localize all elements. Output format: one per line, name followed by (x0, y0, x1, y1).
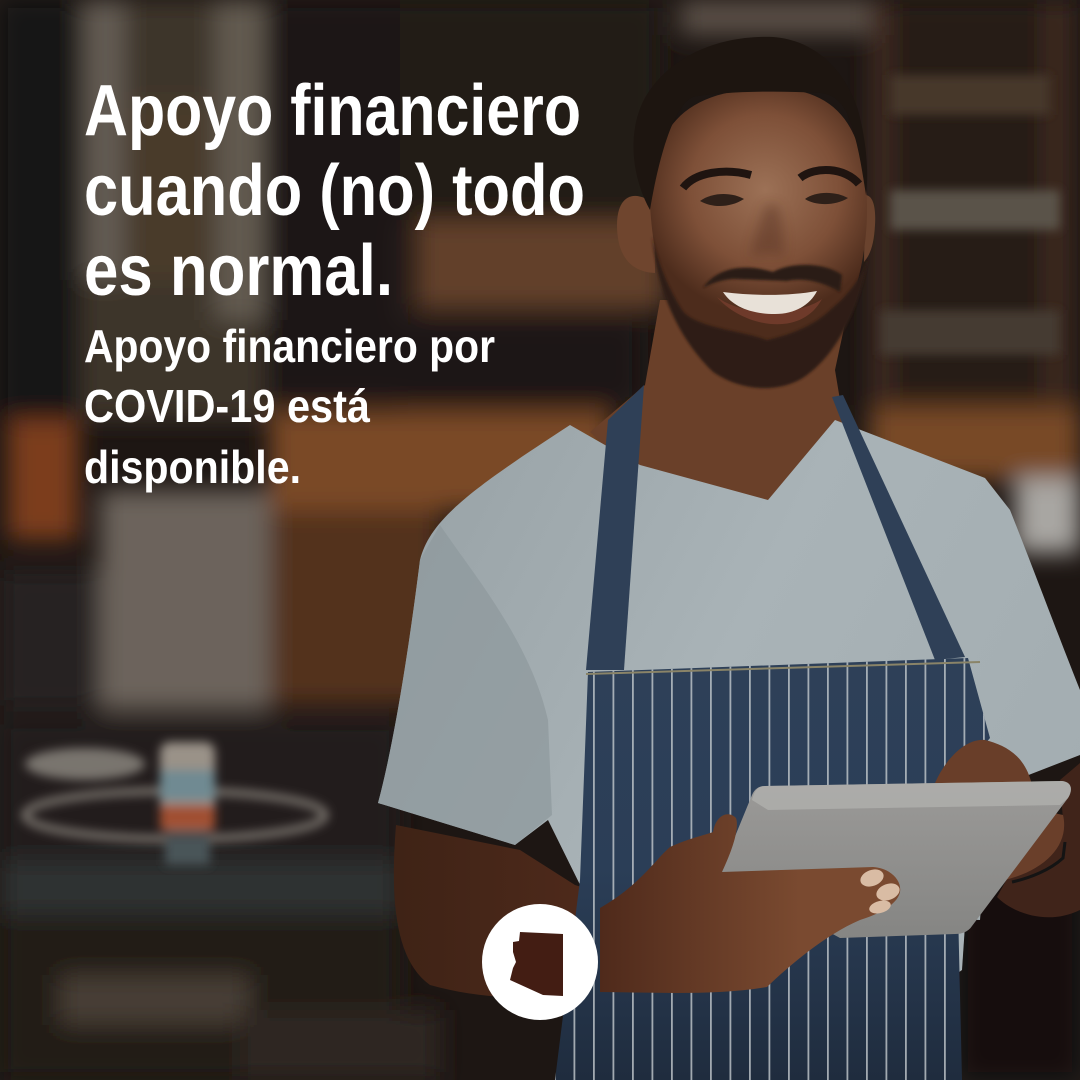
teeth (723, 291, 817, 314)
apron (555, 385, 990, 1080)
subtitle: COVID-19 está (84, 380, 370, 432)
man (378, 37, 1080, 1080)
forearm, left of image (394, 825, 690, 998)
right arm and hand behind tablet (935, 740, 1080, 917)
icon: Arizona state logo (482, 904, 598, 1020)
eyebrow right (800, 170, 859, 184)
head (617, 37, 875, 388)
face (650, 88, 867, 386)
title: es normal. (84, 231, 393, 311)
tablet (720, 781, 1071, 938)
hair (634, 37, 867, 210)
title: cuando (no) todo (84, 151, 585, 231)
subtitle: Apoyo financiero por (84, 320, 495, 372)
eyebrow left (683, 172, 751, 188)
subtitle: disponible. (84, 441, 301, 493)
watch strap (1012, 842, 1065, 882)
neck and chest (590, 300, 850, 515)
apron strap left (586, 385, 644, 670)
nose (752, 205, 784, 258)
mustache (703, 265, 842, 292)
ear right (864, 195, 875, 262)
left hand (600, 814, 902, 993)
eye right (805, 193, 848, 204)
nails (858, 866, 886, 890)
subtitle (84, 320, 495, 493)
beard (652, 236, 868, 388)
apron strap right (832, 395, 965, 660)
t-shirt (378, 420, 1080, 975)
eye left (700, 194, 744, 206)
lower lip (717, 297, 822, 324)
title: Apoyo financiero (84, 71, 581, 151)
ear left (617, 196, 655, 273)
title (84, 71, 585, 311)
